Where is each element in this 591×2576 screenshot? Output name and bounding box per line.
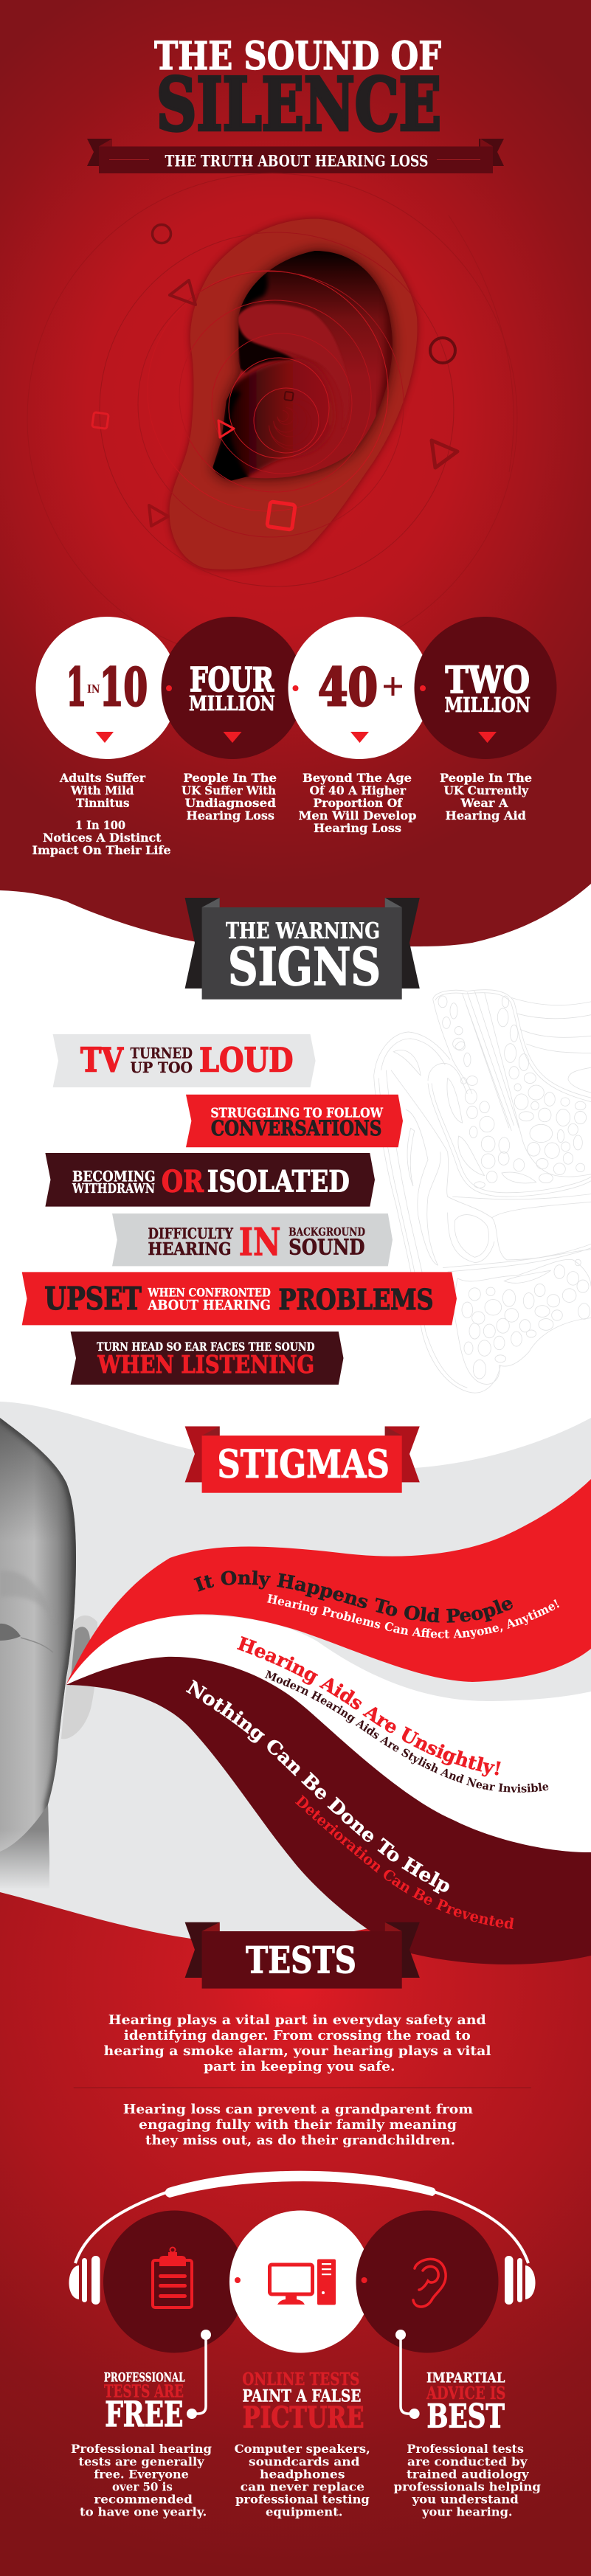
- stat captions: Notices A Distinct: [43, 831, 162, 845]
- test column: impartial advice is best: your hearing.: [421, 2505, 513, 2519]
- warning sign: becoming withdrawn or isolated: BECOMING: [72, 1168, 156, 1185]
- intro text block: engaging fully with their family meaning: [139, 2117, 457, 2133]
- stat: 1 in 10: [35, 617, 179, 759]
- stat captions: Proportion Of: [313, 796, 403, 810]
- ear drawing: [170, 219, 418, 569]
- intro text block: they miss out, as do their grandchildren.: [145, 2133, 455, 2148]
- illustration: head in profile: [0, 1418, 98, 1891]
- test column: impartial advice is best: are conducted by: [407, 2454, 528, 2468]
- warning sign: tv turned up too loud: LOUD: [199, 1040, 294, 1080]
- warning sign: turn head so ear faces the sound when listening: [71, 1332, 343, 1385]
- stat captions: UK Currently: [444, 783, 529, 797]
- stat: four million: FOUR: [190, 660, 274, 699]
- test column: online tests paint a false picture: equipment.: [266, 2505, 342, 2519]
- stat: 1 in 10: IN: [87, 682, 100, 696]
- stat captions: Undiagnosed: [184, 796, 276, 810]
- title line: the sound of: THE SOUND OF: [154, 34, 441, 79]
- stigma 2 text: Modern Hearing Aids Are Stylish And Near Invisible: [264, 1670, 549, 1793]
- warning sign: upset when confronted about hearing problems: WHEN CONFRONTED: [148, 1285, 271, 1299]
- warning signs heading banner: SIGNS: [228, 936, 381, 997]
- warning sign: difficulty hearing in background sound: [112, 1213, 393, 1266]
- stat captions: Hearing Aid: [446, 809, 526, 823]
- test column: impartial advice is best: BEST: [426, 2397, 505, 2436]
- statistics row: [32, 617, 556, 857]
- stigma 2 text: Hearing Aids Are Unsightly!: [237, 1636, 501, 1776]
- test column: impartial advice is best: you understand: [412, 2492, 519, 2507]
- stigma 3 text: Deterioration Can Be Prevented: [295, 1795, 514, 1930]
- stat captions: Tinnitus: [76, 796, 130, 810]
- stat captions: With Mild: [70, 783, 134, 797]
- warning sign: becoming withdrawn or isolated: OR: [162, 1164, 204, 1199]
- test column: online tests paint a false picture: ONLINE TESTS: [242, 2369, 359, 2389]
- stat: 40 plus: 40: [318, 657, 378, 718]
- test column: online tests paint a false picture: PICTURE: [243, 2400, 364, 2434]
- panel: tests background: [0, 1888, 591, 2576]
- ribbon: white: [66, 1616, 591, 1852]
- test column: online tests paint a false picture: can never replace: [241, 2479, 364, 2493]
- connector lines: [187, 2330, 420, 2419]
- stat captions: [32, 771, 532, 857]
- warning sign: difficulty hearing in background sound: SOUND: [288, 1235, 364, 1260]
- test column: professional tests are free: TESTS ARE: [104, 2382, 184, 2402]
- test column: professional tests are free: to have one yearly.: [80, 2505, 207, 2519]
- warning sign: tv turned up too loud: [53, 1034, 316, 1087]
- stat captions: UK Suffer With: [182, 783, 276, 797]
- warning sign: difficulty hearing in background sound: IN: [239, 1220, 280, 1264]
- face shading: [0, 1624, 21, 1641]
- ribbon: dark red: [66, 1657, 591, 1964]
- warning sign: becoming withdrawn or isolated: [45, 1153, 375, 1207]
- warning signs heading banner: [185, 898, 420, 1000]
- test column: impartial advice is best: ADVICE IS: [426, 2383, 505, 2403]
- circle: computer: [229, 2210, 372, 2353]
- intro text block: [74, 2012, 531, 2148]
- test column: professional tests are free: free. Everyone: [94, 2467, 189, 2481]
- test column: professional tests are free: over 50 is: [112, 2479, 173, 2493]
- head: [0, 1418, 76, 1888]
- warning sign: upset when confronted about hearing problems: UPSET: [44, 1281, 142, 1318]
- illustration: ear with sound waves: [27, 173, 517, 663]
- stat: 40 plus: [288, 617, 431, 759]
- stat: two million: TWO: [446, 658, 530, 702]
- panel: hero and statistics background: [0, 0, 591, 952]
- warning sign: turn head so ear faces the sound when listening: TURN HEAD SO EAR FACES THE SOUND: [97, 1340, 315, 1354]
- stigma 1 text: Hearing Problems Can Affect Anyone, Anytime!: [267, 1593, 559, 1639]
- stat: two million: MILLION: [444, 694, 530, 717]
- test column: professional tests are free: [71, 2371, 212, 2519]
- stat: two million: [415, 617, 556, 759]
- circle: ear: [356, 2210, 499, 2353]
- warning sign: tv turned up too loud: TV: [80, 1040, 124, 1080]
- intro text block: Hearing loss can prevent a grandparent from: [123, 2102, 473, 2117]
- headphones: [69, 2171, 536, 2305]
- warning sign: tv turned up too loud: UP TOO: [130, 1059, 193, 1076]
- stat captions: Adults Suffer: [59, 771, 146, 785]
- test column: online tests paint a false picture: headphones: [260, 2467, 345, 2481]
- test column: professional tests are free: PROFESSIONAL: [104, 2371, 185, 2386]
- test column: impartial advice is best: [394, 2370, 541, 2519]
- stigma 1 text: It Only Happens To Old People: [193, 1570, 513, 1623]
- warning sign: struggling to follow conversations: STRUGGLING TO FOLLOW: [210, 1105, 384, 1121]
- warning sign: struggling to follow conversations: CONVERSATIONS: [211, 1116, 381, 1140]
- intro text block: Hearing plays a vital part in everyday safety and: [108, 2012, 486, 2028]
- panel: stigmas background wave: [0, 1402, 591, 1992]
- test column: online tests paint a false picture: soundcards and: [249, 2454, 360, 2468]
- warning sign: upset when confronted about hearing problems: [22, 1272, 457, 1325]
- intro text block: hearing a smoke alarm, your hearing plays a vital: [104, 2043, 491, 2059]
- stat: four million: MILLION: [189, 693, 275, 716]
- stat captions: Wear A: [460, 796, 508, 810]
- test column: online tests paint a false picture: [235, 2369, 370, 2519]
- wave ribbons from ear: [66, 1479, 591, 1964]
- illustration: inner ear anatomy line drawing: [374, 990, 591, 1393]
- stigmas heading banner: [185, 1427, 420, 1493]
- test column: professional tests are free: recommended: [94, 2492, 193, 2507]
- circle: clipboard: [103, 2210, 246, 2353]
- warning sign: becoming withdrawn or isolated: WITHDRAWN: [72, 1182, 155, 1197]
- warning sign: difficulty hearing in background sound: HEARING: [148, 1239, 232, 1259]
- test column: online tests paint a false picture: professional testing: [235, 2492, 370, 2507]
- warning sign: difficulty hearing in background sound: DIFFICULTY: [148, 1225, 234, 1242]
- icon: computer: [270, 2259, 336, 2305]
- intro text block: part in keeping you safe.: [204, 2059, 395, 2074]
- stat: 1 in 10: 10: [100, 657, 148, 718]
- tests heading banner: [185, 1922, 420, 1989]
- warning sign: struggling to follow conversations: [186, 1095, 403, 1147]
- intro text block: identifying danger. From crossing the road to: [124, 2028, 471, 2043]
- warning sign: upset when confronted about hearing problems: ABOUT HEARING: [148, 1298, 271, 1314]
- title: [154, 34, 441, 148]
- stat captions: People In The: [440, 771, 532, 785]
- test column: impartial advice is best: Professional tests: [407, 2442, 524, 2456]
- ribbon: bright red: [66, 1479, 591, 1685]
- sound wave rings: [27, 173, 517, 663]
- test column: professional tests are free: Professional hearing: [71, 2442, 212, 2456]
- warning sign: tv turned up too loud: TURNED: [130, 1045, 193, 1062]
- title line: silence: SILENCE: [156, 63, 441, 148]
- head edge shading: [0, 1418, 76, 1866]
- icon: ear: [413, 2259, 446, 2307]
- warning signs heading banner: THE WARNING: [226, 918, 380, 944]
- ear of head: [61, 1616, 98, 1739]
- stat captions: Hearing Loss: [186, 809, 274, 823]
- floating shapes: [92, 224, 457, 530]
- test column: professional tests are free: tests are generally: [78, 2454, 205, 2468]
- test column: online tests paint a false picture: PAINT A FALSE: [242, 2386, 361, 2406]
- headphones and test circles: [69, 2171, 536, 2419]
- stat captions: Hearing Loss: [314, 821, 401, 835]
- warning sign: difficulty hearing in background sound: BACKGROUND: [288, 1226, 365, 1239]
- test column: impartial advice is best: IMPARTIAL: [426, 2370, 505, 2386]
- stat captions: Beyond The Age: [303, 771, 412, 785]
- stigma 3 text: Nothing Can Be Done To Help: [186, 1679, 449, 1894]
- icon: clipboard: [153, 2247, 192, 2307]
- stat: four million: [161, 617, 304, 759]
- stat captions: Impact On Their Life: [32, 843, 171, 857]
- stat captions: People In The: [183, 771, 277, 785]
- warning sign: becoming withdrawn or isolated: ISOLATED: [207, 1164, 350, 1199]
- tests heading banner: TESTS: [246, 1939, 356, 1981]
- stat: 1 in 10: 1: [66, 657, 86, 718]
- subtitle ribbon: [87, 139, 504, 173]
- subtitle ribbon: THE TRUTH ABOUT HEARING LOSS: [165, 152, 428, 170]
- test column: impartial advice is best: professionals helping: [394, 2479, 541, 2493]
- stigmas heading banner: STIGMAS: [217, 1442, 390, 1487]
- stat captions: Men Will Develop: [298, 809, 416, 823]
- warning sign: turn head so ear faces the sound when listening: WHEN LISTENING: [97, 1350, 314, 1379]
- warning sign: upset when confronted about hearing problems: PROBLEMS: [279, 1284, 434, 1317]
- test column: online tests paint a false picture: Computer speakers,: [235, 2442, 370, 2456]
- test column: impartial advice is best: trained audiology: [407, 2467, 530, 2481]
- stigma 1 text: [193, 1570, 559, 1639]
- test column: professional tests are free: FREE: [105, 2395, 183, 2435]
- stat captions: 1 In 100: [75, 818, 125, 832]
- stat captions: Of 40 A Higher: [310, 783, 407, 797]
